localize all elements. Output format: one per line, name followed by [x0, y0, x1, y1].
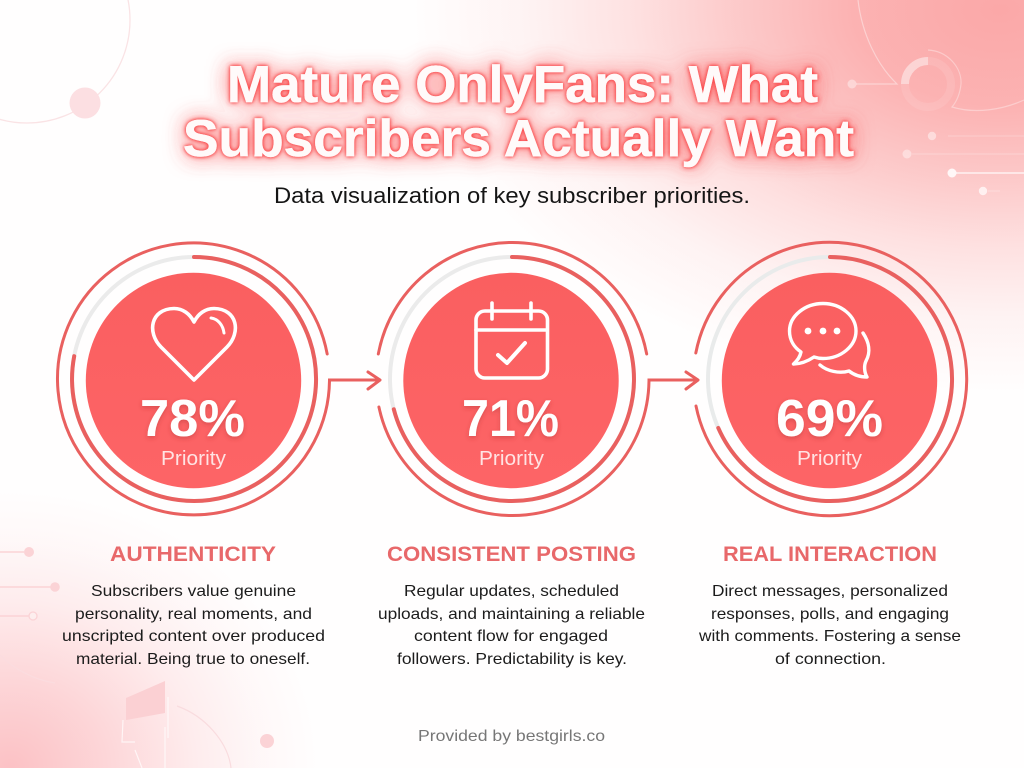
heading: authenticity: AUTHENTICITY [110, 543, 276, 566]
text block: consistent posting: followers. Predictability is key. [397, 651, 627, 668]
text block: real interaction: of connection. [775, 651, 886, 668]
title: Subscribers Actually Want [183, 110, 854, 168]
label: Priority [797, 448, 862, 470]
text block: real interaction: responses, polls, and engaging [711, 606, 949, 623]
text block: real interaction [698, 583, 961, 668]
disk [722, 273, 937, 488]
text block: authenticity [62, 583, 325, 668]
text block: authenticity: material. Being true to oneself. [76, 651, 310, 668]
outer ring and arrow [378, 242, 697, 516]
footer credit: Provided by bestgirls.co [418, 728, 605, 745]
disk [403, 273, 619, 488]
panel: real interaction gauge [696, 242, 967, 516]
progress ring 71% [390, 257, 634, 501]
text block: real interaction: with comments. Fostering a sense [698, 628, 961, 645]
text block: authenticity: Subscribers value genuine [91, 583, 296, 600]
text block: consistent posting [378, 583, 645, 668]
outer ring [696, 242, 967, 516]
panel: authenticity gauge [58, 243, 380, 515]
text block: authenticity: personality, real moments, and [75, 606, 312, 623]
text block: authenticity: unscripted content over produced [62, 628, 325, 645]
text block: consistent posting: content flow for engaged [414, 628, 608, 645]
text block: consistent posting: uploads, and maintaining a reliable [378, 606, 645, 623]
percentage: 69% [776, 390, 883, 448]
percentage: 78% [140, 390, 245, 448]
subtitle: Data visualization of key subscriber priorities. [274, 183, 750, 208]
decoration: top-left circle and dot [0, 0, 130, 123]
icon: calendar [476, 303, 548, 378]
heading: real interaction: REAL INTERACTION [723, 543, 937, 566]
label: Priority [479, 448, 544, 470]
outer ring and arrow [58, 243, 379, 515]
title [183, 56, 854, 168]
decoration: top-right donut and connector lines [848, 0, 1024, 195]
arrow head [368, 372, 380, 389]
decoration: bottom-left lines and shapes [0, 547, 274, 768]
icon: chat bubbles [790, 304, 869, 377]
arrow head [686, 372, 698, 389]
panel: consistent posting gauge [378, 242, 698, 516]
text block: consistent posting: Regular updates, scheduled [404, 583, 619, 600]
progress ring 69% [708, 257, 952, 501]
text block: real interaction: Direct messages, personalized [712, 583, 948, 600]
heading: consistent posting: CONSISTENT POSTING [387, 543, 636, 566]
progress ring 78% [72, 257, 316, 501]
disk [86, 273, 301, 488]
icon: heart [153, 308, 235, 380]
title: Mature OnlyFans: What [227, 56, 818, 114]
label: Priority [161, 448, 226, 470]
percentage: 71% [462, 390, 559, 448]
